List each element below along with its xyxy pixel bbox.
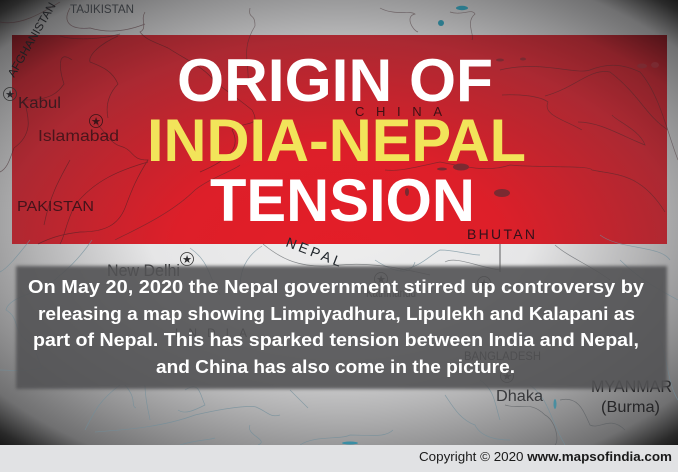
label: Kabul: Kabul <box>18 95 61 112</box>
capital city star markers: ★ <box>479 278 489 290</box>
panel: red title banner <box>12 35 667 244</box>
title <box>147 47 526 234</box>
description line 1: On May 20, 2020 the Nepal government stirred up controversy by <box>28 276 645 297</box>
capital city star markers <box>4 88 514 383</box>
capital city star markers: ★ <box>502 371 512 383</box>
description line 3: part of Nepal. This has sparked tension between India and Nepal, <box>33 329 639 350</box>
capital city star markers: ★ <box>5 89 15 101</box>
capital city star markers: ★ <box>91 116 101 128</box>
capital city star markers: ★ <box>182 254 192 266</box>
label: Tajikistan: TAJIKISTAN <box>70 2 134 16</box>
capital city star markers: ★ <box>376 274 386 286</box>
label: India: INDIA <box>175 326 247 340</box>
label: China: CHINA <box>355 104 442 119</box>
footer bar <box>0 445 678 472</box>
label: New Delhi: New Delhi <box>107 262 180 280</box>
copyright text: Copyright © 2020 www.mapsofindia.com <box>419 450 672 464</box>
label: Bangladesh: BANGLADESH <box>464 349 541 363</box>
lakes <box>342 6 659 445</box>
label: Dhaka: Dhaka <box>496 388 543 405</box>
label: Afghanistan: AFGHANISTAN <box>6 1 59 80</box>
panel: grey description box <box>16 266 667 389</box>
title line: INDIA-NEPAL: INDIA-NEPAL <box>147 107 526 174</box>
description line 2: releasing a map showing Limpiyadhura, Lipulekh and Kalapani as <box>38 303 635 324</box>
title line: TENSION: TENSION <box>210 167 475 234</box>
title line: ORIGIN OF: ORIGIN OF <box>177 47 493 114</box>
label: Kathmandu: Kathmandu <box>366 286 416 300</box>
description line 4: and China has also come in the picture. <box>156 356 515 377</box>
label: Pakistan: PAKISTAN <box>17 198 94 215</box>
label: Nepal: NEPAL <box>284 234 344 270</box>
label: Islamabad: Islamabad <box>38 128 119 145</box>
label: Bhutan: BHUTAN <box>467 226 535 242</box>
description text <box>28 276 645 377</box>
label: Myanmar: MYANMAR <box>591 377 672 396</box>
label: Burma: (Burma) <box>601 399 660 416</box>
